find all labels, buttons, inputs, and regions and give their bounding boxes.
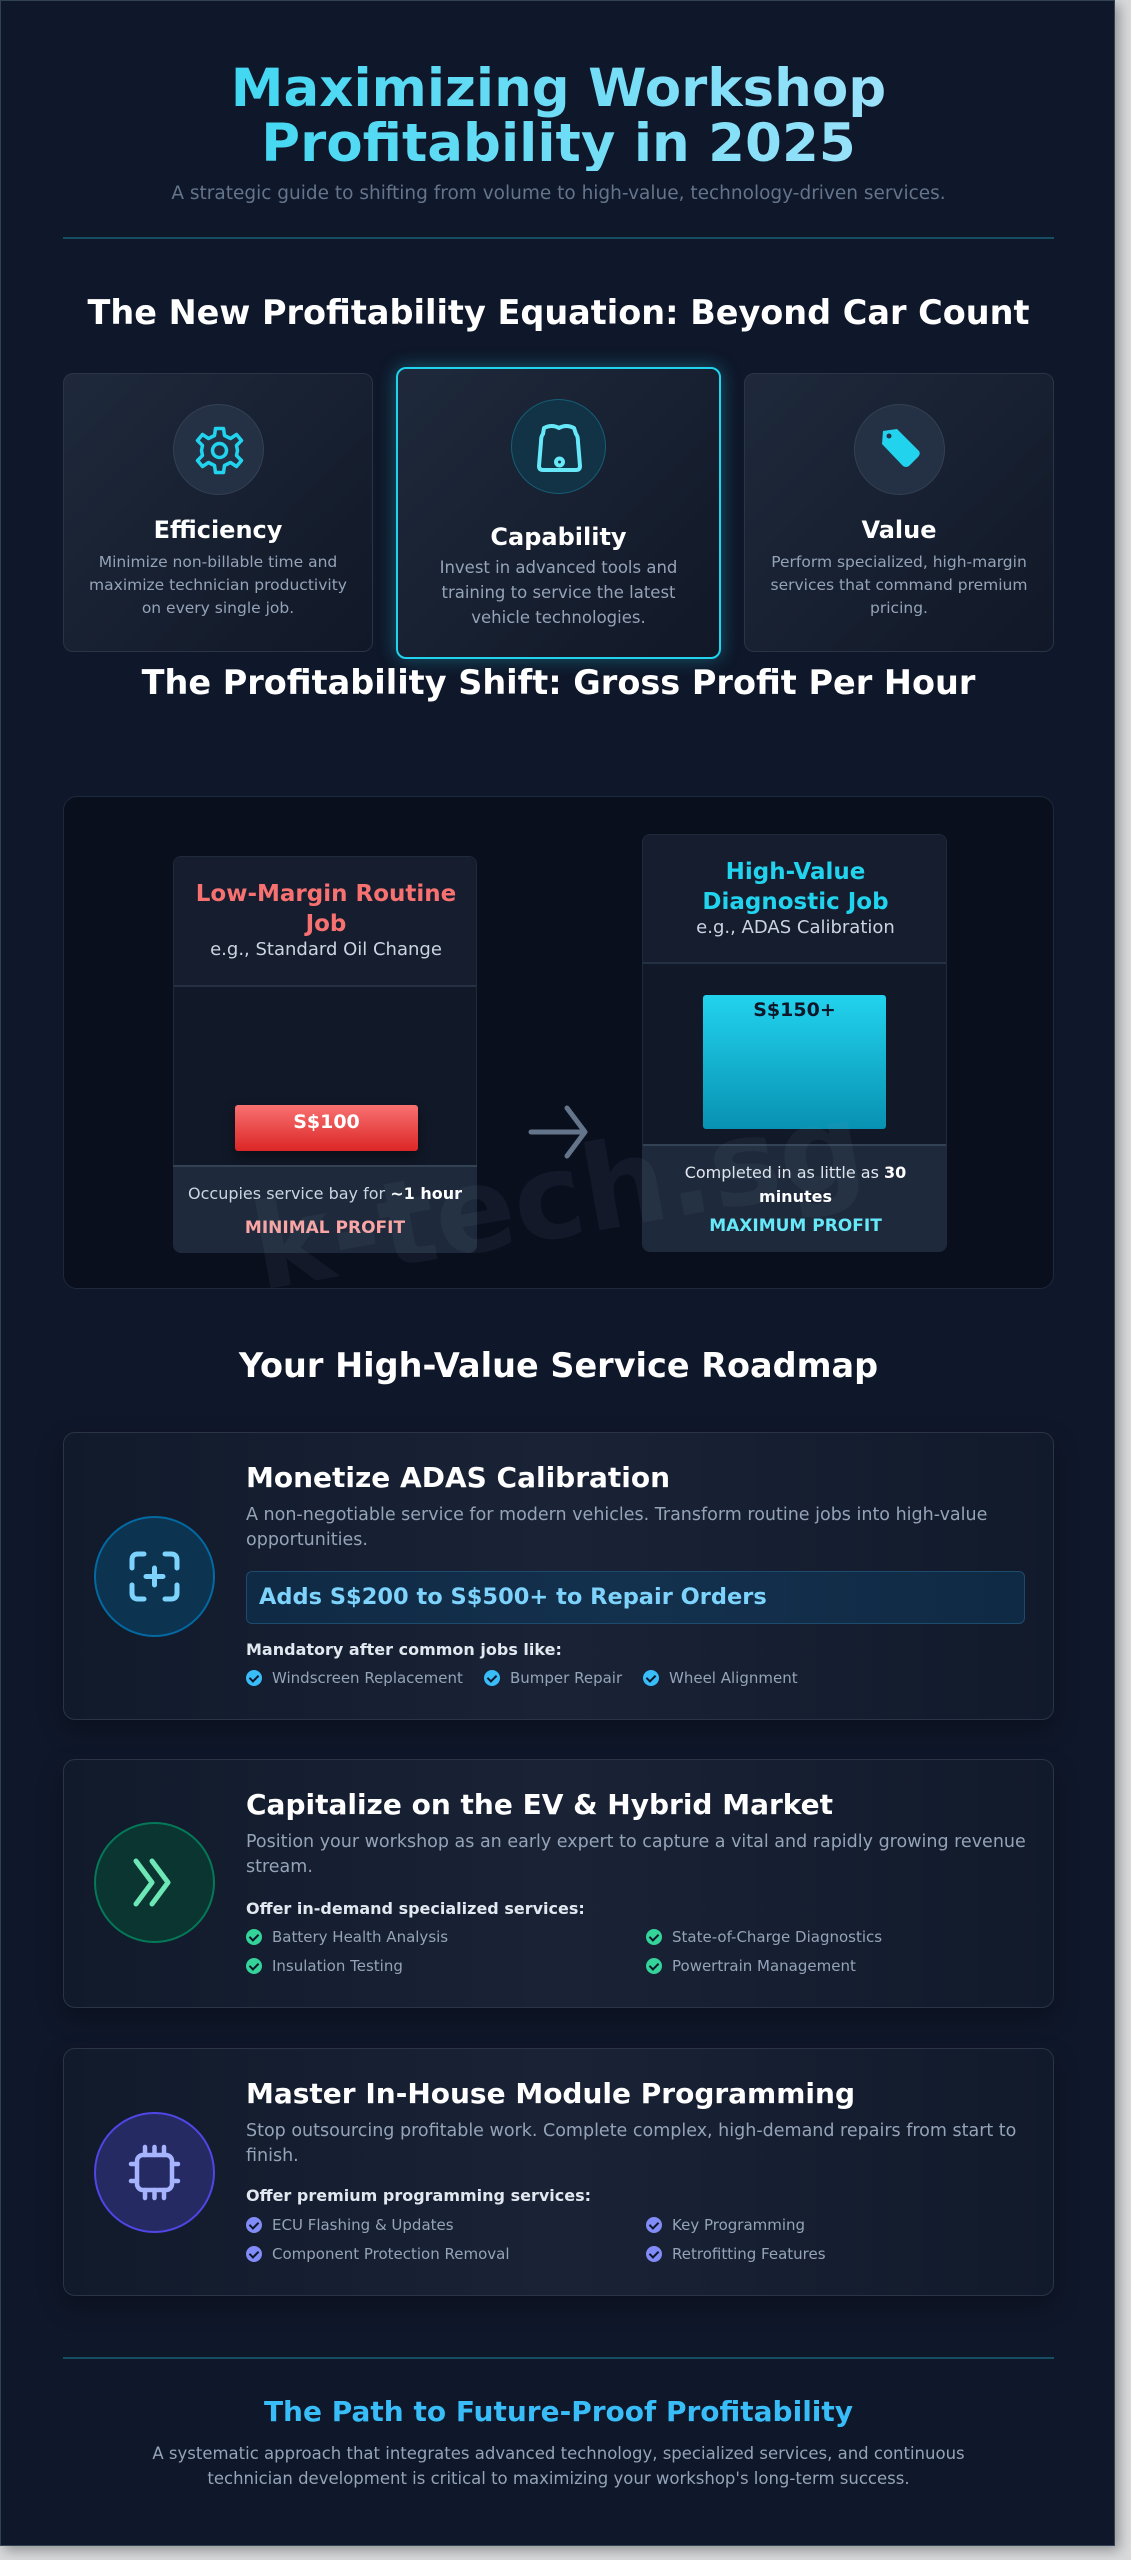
icon: gear xyxy=(173,404,264,495)
arrow xyxy=(528,1106,588,1158)
list xyxy=(246,2216,826,2263)
sub-heading: Mandatory after common jobs like: xyxy=(246,1640,562,1659)
column: low-margin job: e.g., Standard Oil Change xyxy=(210,939,442,960)
panel: module programming xyxy=(63,2048,1054,2296)
description: A non-negotiable service for modern vehicles. Transform routine jobs into high-value opportunities. xyxy=(246,1505,987,1550)
title xyxy=(1,61,1116,171)
footer: low margin: MINIMAL PROFIT xyxy=(245,1218,405,1238)
list: Powertrain Management xyxy=(672,1957,856,1975)
column: low-margin job xyxy=(173,856,477,1206)
panel: value xyxy=(744,373,1054,652)
panel: ADAS calibration xyxy=(63,1432,1054,1720)
heading: roadmap: Your High-Value Service Roadmap xyxy=(239,1346,878,1385)
column: high-value job: e.g., ADAS Calibration xyxy=(696,917,895,938)
panel: EV & hybrid xyxy=(63,1759,1054,2008)
bar: S$150+: S$150+ xyxy=(753,999,836,1021)
header text: Job xyxy=(306,911,346,937)
description: Stop outsourcing profitable work. Complete complex, high-demand repairs from start to finish. xyxy=(246,2121,1016,2166)
icon: tag xyxy=(854,404,945,495)
title: Capitalize on the EV & Hybrid Market xyxy=(246,1788,833,1821)
title: Monetize ADAS Calibration xyxy=(246,1461,670,1494)
list: Bumper Repair xyxy=(510,1669,622,1687)
header text xyxy=(196,881,456,937)
list: Windscreen Replacement xyxy=(272,1669,463,1687)
list: Retrofitting Features xyxy=(672,2245,826,2263)
icon: scan xyxy=(94,1516,215,1637)
card title: Efficiency xyxy=(154,516,282,544)
list: Insulation Testing xyxy=(272,1957,403,1975)
title: Master In-House Module Programming xyxy=(246,2077,855,2110)
icon: chip xyxy=(94,2112,215,2233)
callout: revenue: Adds S$200 to S$500+ to Repair Orders xyxy=(259,1584,767,1610)
card title: Value xyxy=(861,516,937,544)
bar: S$150+ xyxy=(703,995,886,1129)
footer: high value: MAXIMUM PROFIT xyxy=(709,1216,882,1236)
footer: high value: Completed in as little as 30 minutes xyxy=(685,1163,906,1206)
callout: revenue xyxy=(246,1571,1025,1624)
heading: profitability shift: The Profitability Shift: Gross Profit Per Hour xyxy=(142,663,975,702)
heading: new profitability equation: The New Profitability Equation: Beyond Car Count xyxy=(88,293,1029,332)
bar: S$100: S$100 xyxy=(293,1111,360,1133)
list: State-of-Charge Diagnostics xyxy=(672,1928,882,1946)
list xyxy=(246,1928,882,1975)
card text: Minimize non-billable time and maximize technician productivity on every single job. xyxy=(89,553,347,617)
title: Maximizing Workshop xyxy=(231,58,886,119)
footer: low margin: Occupies service bay for ~1 hour xyxy=(188,1184,462,1203)
icon: capability xyxy=(511,399,606,494)
bar: S$100 xyxy=(235,1105,418,1151)
description: Position your workshop as an early expert to capture a vital and rapidly growing revenue stream. xyxy=(246,1832,1026,1877)
column: high-value job xyxy=(642,834,947,1252)
card text: Perform specialized, high-margin services that command premium pricing. xyxy=(771,553,1027,617)
card text: Invest in advanced tools and training to service the latest vehicle technologies. xyxy=(440,558,677,627)
panel: capability xyxy=(396,367,721,659)
header text xyxy=(702,859,889,915)
list: Component Protection Removal xyxy=(272,2245,510,2263)
icon: chevrons xyxy=(94,1822,215,1943)
sub-heading: Offer premium programming services: xyxy=(246,2186,591,2205)
sub-heading: Offer in-demand specialized services: xyxy=(246,1899,585,1918)
title: Profitability in 2025 xyxy=(261,113,856,174)
list xyxy=(246,1669,798,1687)
footer title: The Path to Future-Proof Profitability xyxy=(264,2395,853,2428)
footer: low margin xyxy=(173,1165,477,1253)
list: ECU Flashing & Updates xyxy=(272,2216,454,2234)
footer: high value xyxy=(643,1144,948,1253)
header text: Diagnostic Job xyxy=(702,889,889,915)
chart panel: gross profit per hour xyxy=(63,796,1054,1289)
subtitle: A strategic guide to shifting from volume to high-value, technology-driven services. xyxy=(171,183,946,204)
list: Key Programming xyxy=(672,2216,805,2234)
panel: efficiency xyxy=(63,373,373,652)
footer text: A systematic approach that integrates advanced technology, specialized services, and continuous technician development is critical to maximizing your workshop's long-term success. xyxy=(152,2444,965,2488)
list: Battery Health Analysis xyxy=(272,1928,448,1946)
list: Wheel Alignment xyxy=(669,1669,798,1687)
header text: High-Value xyxy=(726,859,865,885)
header text: Low-Margin Routine xyxy=(196,881,456,907)
card title: Capability xyxy=(490,523,627,551)
